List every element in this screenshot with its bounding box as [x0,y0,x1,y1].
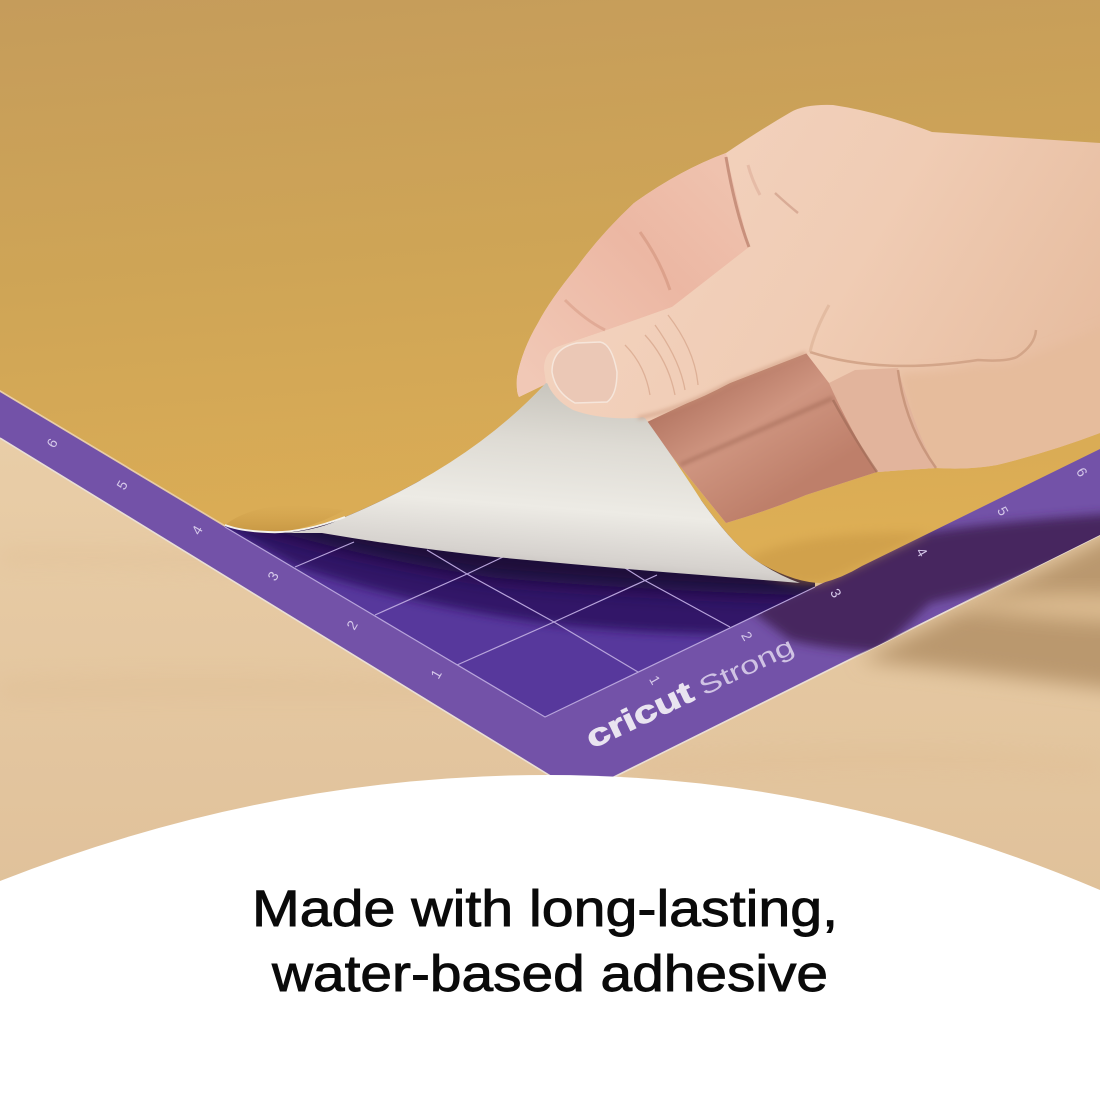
thumb [544,213,870,418]
wood table background [0,380,1100,900]
left ruler numbers: 5 [994,504,1012,519]
index finger [517,153,749,397]
thumb underside shadow [638,353,806,418]
left ruler numbers: 2 [738,629,756,644]
purple cutting mat [0,392,1100,780]
finger gap line [680,398,833,465]
knuckle wrinkles [625,315,698,395]
mat label: Strong: Strong [695,632,799,701]
thumbnail [552,342,617,403]
grid lines [225,527,815,717]
left ruler numbers: 6 [1073,465,1091,480]
left ruler numbers: 3 [827,586,845,601]
shadow of peeled paper on mat [225,480,830,635]
hand back and palm [517,105,1100,523]
paper curl white edge [225,517,345,532]
bottom ruler numbers: 1 [646,673,664,688]
table shadow on the right [860,490,1100,700]
white curved text panel [0,775,1100,1100]
mat logo: cricut: cricut [580,674,699,755]
shadow on right mat band [750,508,1100,652]
left ruler numbers: 5 [113,477,131,492]
left ruler numbers: 4 [913,545,931,560]
hand creases and shading [565,157,1036,472]
left ruler numbers: 3 [264,568,282,583]
headline text: water-based adhesive [271,945,828,1002]
adhesive grid area [225,480,815,717]
heel of the hand [901,368,1100,469]
peeled paper corner [285,383,800,583]
left ruler numbers: 2 [343,617,361,632]
gold paper sheet [0,0,1100,584]
gold shade at left curl [225,505,345,532]
mat white edge [0,438,1100,780]
left ruler numbers: 6 [43,435,61,450]
left ruler numbers: 4 [188,522,206,537]
left ruler numbers: 1 [427,666,445,681]
headline text: Made with long-lasting, [252,880,838,937]
headline text [252,880,838,1002]
left ruler numbers [43,435,1091,688]
ring finger [829,368,936,472]
middle finger [645,353,877,523]
shadow on gold at right curl [745,533,930,584]
